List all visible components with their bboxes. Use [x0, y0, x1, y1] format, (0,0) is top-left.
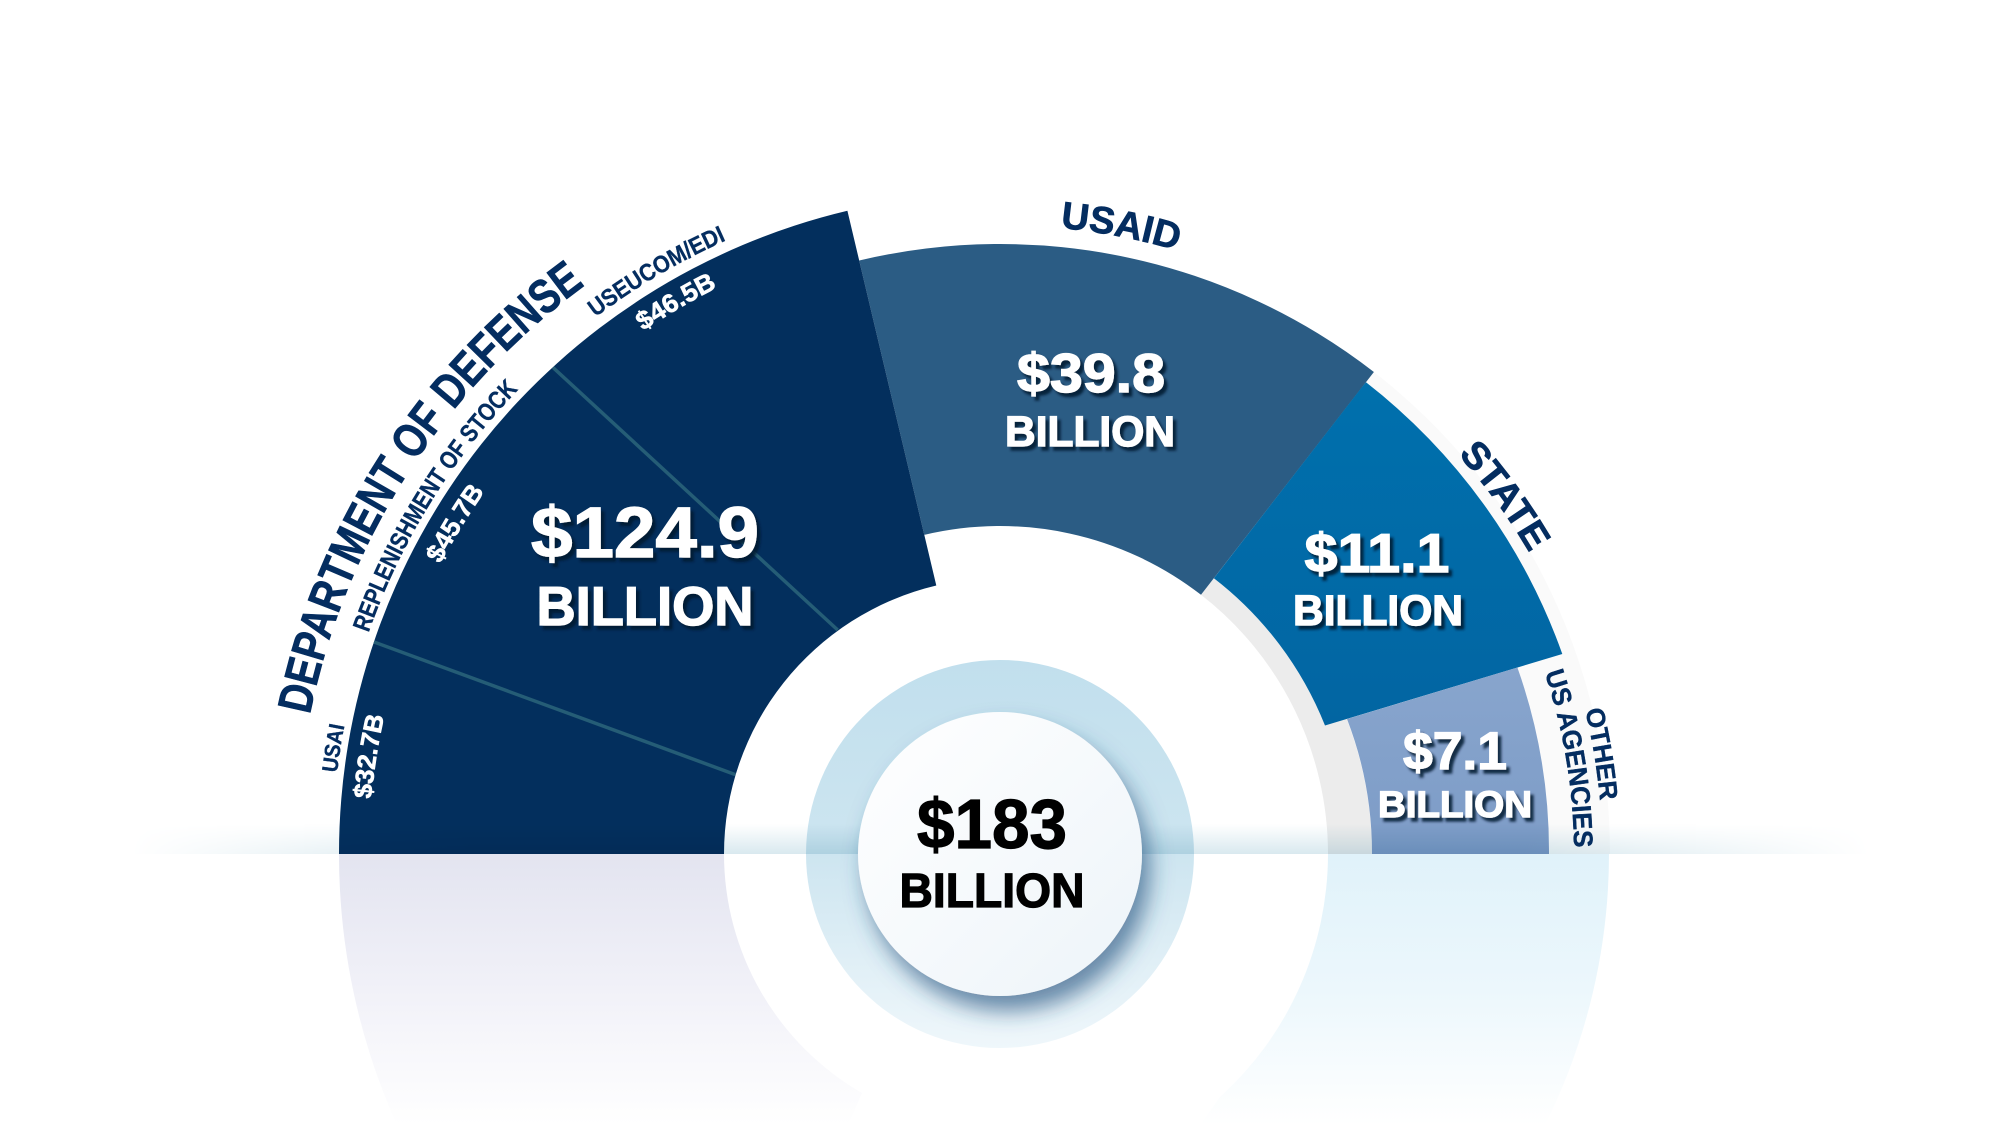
heading: Other US Agencies — [1546, 668, 1618, 847]
value: USAID $39.8 billion — [1005, 342, 1175, 456]
reflection: right-hand segments — [1200, 854, 1609, 1125]
heading: USAID: USAID — [1063, 202, 1180, 248]
reflection: Department of Defense segment — [339, 854, 862, 1125]
heading: State: STATE — [1462, 442, 1552, 552]
centre ring — [806, 660, 1194, 1048]
sub-label: USEUCOM/EDI: USEUCOM/EDI — [586, 226, 726, 315]
value: Other US Agencies $7.1 billion: BILLION — [1378, 784, 1532, 825]
total: $183 billion: BILLION — [900, 865, 1084, 918]
value: Other US Agencies $7.1 billion — [1378, 722, 1532, 825]
value: Department of Defense $124.9 billion: $124.9 — [531, 494, 759, 573]
value: Other US Agencies $7.1 billion: $7.1 — [1403, 722, 1507, 781]
sub-value: $45.7B: $45.7B — [426, 484, 482, 562]
sub-value: $32.7B: $32.7B — [352, 715, 384, 798]
panel: Department of Defense segment — [339, 211, 936, 854]
sub-label: Replenishment of Stock: REPLENISHMENT OF STOCK — [352, 378, 518, 632]
total: $183 billion: $183 — [917, 785, 1067, 863]
value: State $11.1 billion: BILLION — [1293, 587, 1463, 635]
panel: USAID segment — [859, 244, 1374, 595]
backing ring behind State and Other US Agencies — [1201, 372, 1610, 854]
value: Department of Defense $124.9 billion: BILLION — [536, 575, 754, 637]
heading: Other US Agencies: OTHER — [1586, 708, 1618, 800]
value: USAID $39.8 billion: BILLION — [1005, 408, 1175, 456]
heading: Other US Agencies: US AGENCIES — [1546, 668, 1593, 847]
value: State $11.1 billion: $11.1 — [1304, 522, 1450, 584]
centre disc — [858, 712, 1142, 996]
total: $183 billion — [900, 785, 1084, 918]
sub-label: USAI: USAI — [322, 724, 344, 772]
panel: State segment — [1214, 382, 1562, 726]
value: USAID $39.8 billion: $39.8 — [1017, 342, 1165, 404]
value: State $11.1 billion — [1293, 522, 1463, 635]
value: Department of Defense $124.9 billion — [531, 494, 759, 637]
sub-value: $46.5B: $46.5B — [636, 274, 715, 330]
horizon glow — [210, 830, 1791, 854]
heading: Department of Defense: DEPARTMENT OF DEFENSE — [278, 260, 584, 713]
panel: Other US Agencies segment — [1347, 668, 1549, 854]
